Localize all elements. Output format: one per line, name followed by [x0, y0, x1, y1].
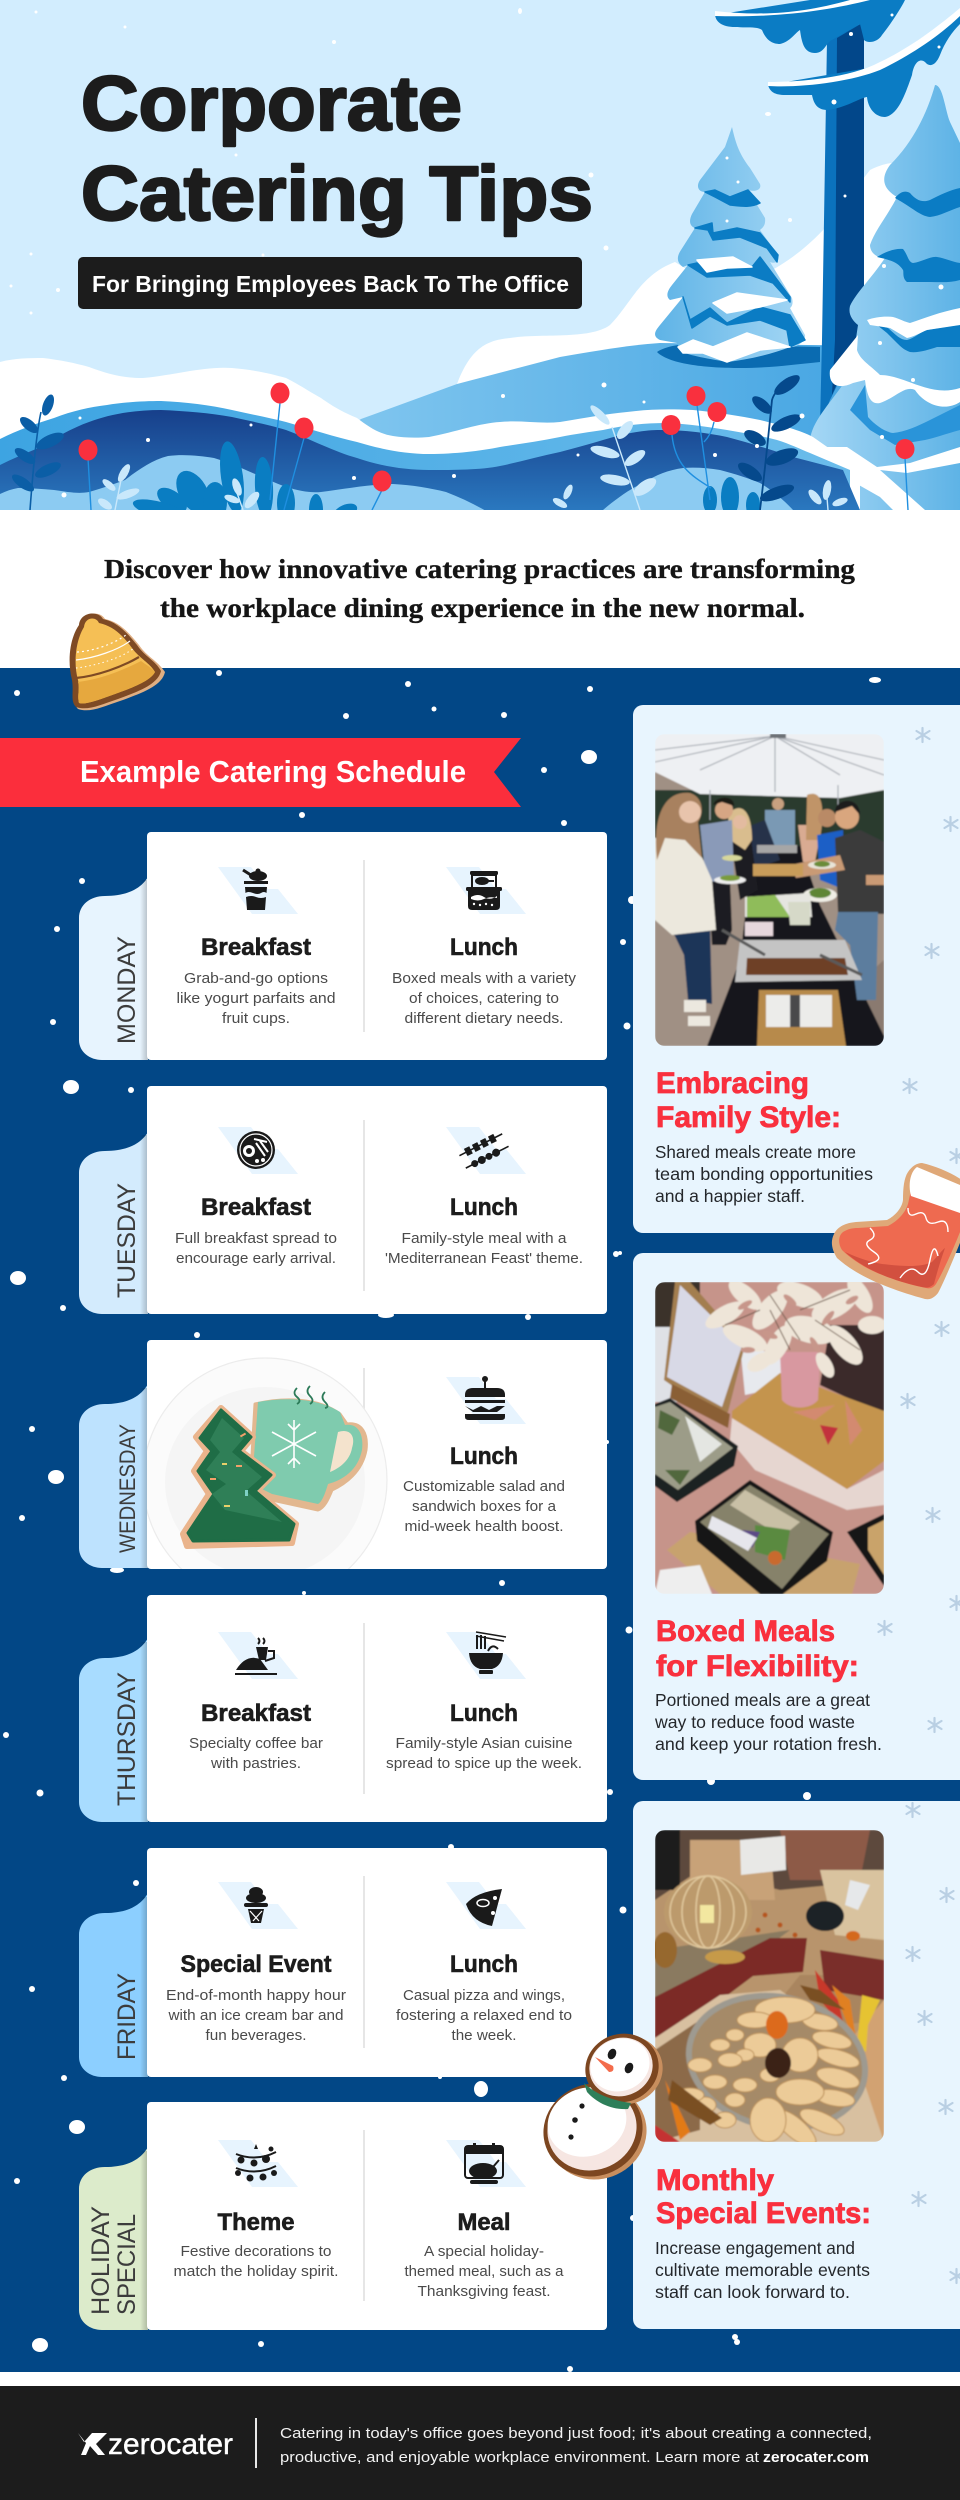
breakfast column: Breakfast [201, 1700, 311, 1727]
icon: cookie plate with tree and mug [147, 1358, 388, 1569]
heading: Embracing [656, 1067, 809, 1100]
panel: boxed meals [633, 1253, 960, 1780]
footer text: Catering in today's office goes beyond just food; it's about creating a connected, [280, 2425, 872, 2442]
lunch column: different dietary needs. [404, 1011, 564, 1027]
white snow band [0, 358, 860, 510]
lunch column [403, 1376, 565, 1535]
lunch column: Casual pizza and wings, [403, 1988, 565, 2004]
breakfast column: Grab-and-go options [184, 971, 328, 987]
icon: noodle bowl [469, 1632, 506, 1674]
heading: Family Style: [656, 1101, 841, 1134]
day tab: WEDNESDAY [115, 1424, 140, 1553]
lunch column: Lunch [450, 1700, 518, 1727]
day tab [79, 1893, 148, 2077]
icon: tree cookie [183, 1408, 296, 1546]
lunch column: fostering a relaxed end to [396, 2008, 572, 2024]
theme column: Festive decorations to [180, 2244, 332, 2260]
meal column: Thanksgiving feast. [418, 2284, 550, 2300]
row: holiday special [79, 2102, 607, 2330]
theme column [174, 2140, 338, 2280]
body text: Shared meals create more [655, 1142, 856, 1162]
icon: calendar with turkey [465, 2143, 503, 2184]
special event column: End-of-month happy hour [166, 1988, 346, 2004]
day tab: FRIDAY [113, 1973, 141, 2060]
icon: bell cookie [70, 613, 165, 710]
special event column [166, 1882, 346, 2044]
photo: buffet line [655, 734, 884, 1046]
icon: coffee and croissant [235, 1638, 277, 1675]
intro text: Discover how innovative catering practices are transforming [104, 554, 856, 584]
title [81, 61, 593, 237]
breakfast column: Full breakfast spread to [175, 1231, 337, 1247]
day tab: TUESDAY [113, 1183, 141, 1298]
heading: Boxed Meals [656, 1615, 835, 1648]
theme column: match the holiday spirit. [174, 2264, 338, 2280]
banner: example catering schedule: Example Catering Schedule [80, 754, 466, 789]
lunch column: Lunch [450, 1951, 518, 1978]
lunch column [386, 1632, 582, 1772]
body text: and keep your rotation fresh. [655, 1734, 882, 1754]
heading: Special Events: [656, 2197, 871, 2230]
logo: zerocater [108, 2428, 233, 2461]
lunch column: 'Mediterranean Feast' theme. [385, 1251, 583, 1267]
lunch column [396, 1882, 572, 2044]
day tab [79, 1638, 148, 1822]
theme column: Theme [218, 2209, 294, 2236]
body text: team bonding opportunities [655, 1164, 873, 1184]
banner: example catering schedule [0, 738, 521, 807]
heading [656, 1615, 859, 1683]
body text: Portioned meals are a great [655, 1690, 870, 1710]
icon: breakfast plate [237, 1131, 275, 1169]
day tab: MONDAY [113, 936, 141, 1044]
body text: and a happier staff. [655, 1186, 805, 1206]
meal column: themed meal, such as a [404, 2264, 564, 2280]
subtitle box [78, 257, 582, 309]
lunch column: Lunch [450, 934, 518, 961]
day tab [79, 877, 148, 1060]
icon: tall tree trunk and branches [715, 0, 960, 425]
lunch column: mid-week health boost. [404, 1519, 564, 1535]
meal column: Meal [458, 2209, 510, 2236]
icon: mug cookie [250, 1386, 366, 1510]
lunch column: of choices, catering to [409, 991, 559, 1007]
day tab [79, 1384, 148, 1568]
footer [0, 2386, 960, 2500]
lunch column: Family-style Asian cuisine [396, 1736, 572, 1752]
icon: festive lights [235, 2144, 277, 2182]
lunch column: Family-style meal with a [402, 1231, 567, 1247]
body text: cultivate memorable events [655, 2260, 870, 2280]
footer text [280, 2425, 872, 2466]
subtitle box: For Bringing Employees Back To The Office [92, 271, 569, 297]
intro text: the workplace dining experience in the new normal. [160, 593, 805, 623]
breakfast column: like yogurt parfaits and [176, 991, 336, 1007]
navy schedule background [0, 668, 960, 2372]
row: monday [79, 832, 607, 1060]
falling snow dots [3, 670, 881, 2372]
body text [655, 1142, 873, 1206]
heading: Monthly [656, 2164, 774, 2197]
icon: snowman cookie [530, 2023, 672, 2193]
icon: ice cream cone [244, 1887, 268, 1923]
breakfast column: encourage early arrival. [176, 1251, 336, 1267]
lunch column: sandwich boxes for a [412, 1499, 557, 1515]
panel: embracing family style [633, 705, 960, 1233]
special event column: with an ice cream bar and [167, 2008, 344, 2024]
intro text [104, 554, 856, 623]
heading [656, 1067, 841, 1134]
icon: large snowy pine tree [810, 85, 960, 510]
lunch column [392, 867, 577, 1027]
lunch column: Customizable salad and [403, 1479, 565, 1495]
special event column: Special Event [180, 1951, 332, 1978]
header illustration [0, 0, 960, 526]
footer text: productive, and enjoyable workplace environment. Learn more at [280, 2449, 760, 2466]
row: thursday [79, 1595, 607, 1822]
icon: parfait cup [243, 868, 268, 910]
breakfast column: Specialty coffee bar [189, 1736, 323, 1752]
body text: staff can look forward to. [655, 2282, 850, 2302]
breakfast column [175, 1127, 337, 1267]
title: Catering Tips [81, 151, 593, 237]
day tab [79, 2147, 148, 2330]
icon: stocking cookie [832, 1163, 960, 1299]
lunch column: Lunch [450, 1194, 518, 1221]
icon: skewers [458, 1130, 510, 1172]
icon: pizza slice [466, 1889, 502, 1926]
day tab [79, 1132, 148, 1314]
icon: small snowy pine tree [655, 127, 820, 368]
icon: plant leaves [9, 371, 849, 526]
food on table [714, 876, 746, 884]
breakfast column [189, 1632, 323, 1772]
breakfast column: Breakfast [201, 934, 311, 961]
photo: boxed meals [655, 1273, 886, 1594]
row: wednesday [79, 1340, 607, 1569]
breakfast column [176, 867, 336, 1027]
lunch column: spread to spice up the week. [386, 1756, 582, 1772]
icon: stacked meal boxes [466, 871, 502, 910]
icon: sandwich [465, 1376, 505, 1420]
panel: monthly special events [633, 1801, 960, 2329]
meal column [404, 2140, 564, 2300]
row: tuesday [79, 1086, 607, 1314]
heading [656, 2164, 871, 2230]
footer text: zerocater.com [763, 2449, 869, 2466]
lunch column: the week. [452, 2028, 516, 2044]
body text [655, 2238, 870, 2302]
day tab: HOLIDAY [87, 2206, 115, 2315]
icon: red berries [78, 382, 914, 510]
breakfast column: Breakfast [201, 1194, 311, 1221]
day tab: SPECIAL [113, 2214, 141, 2315]
special event column: fun beverages. [206, 2028, 306, 2044]
breakfast column: fruit cups. [222, 1011, 290, 1027]
body text: Increase engagement and [655, 2238, 855, 2258]
guests at table [765, 810, 795, 850]
body text: way to reduce food waste [654, 1712, 855, 1732]
lunch column: Lunch [450, 1443, 518, 1470]
photo: autumn cookies [653, 1830, 884, 2152]
lunch column: Boxed meals with a variety [392, 971, 577, 987]
row: friday [79, 1848, 607, 2077]
lunch column [385, 1127, 583, 1267]
day tab: THURSDAY [113, 1672, 141, 1806]
body text [654, 1690, 882, 1754]
title: Corporate [81, 61, 462, 147]
heading: for Flexibility: [656, 1650, 859, 1683]
snowflake marks on panels [878, 728, 960, 2283]
breakfast column: with pastries. [210, 1756, 301, 1772]
meal column: A special holiday- [424, 2244, 544, 2260]
